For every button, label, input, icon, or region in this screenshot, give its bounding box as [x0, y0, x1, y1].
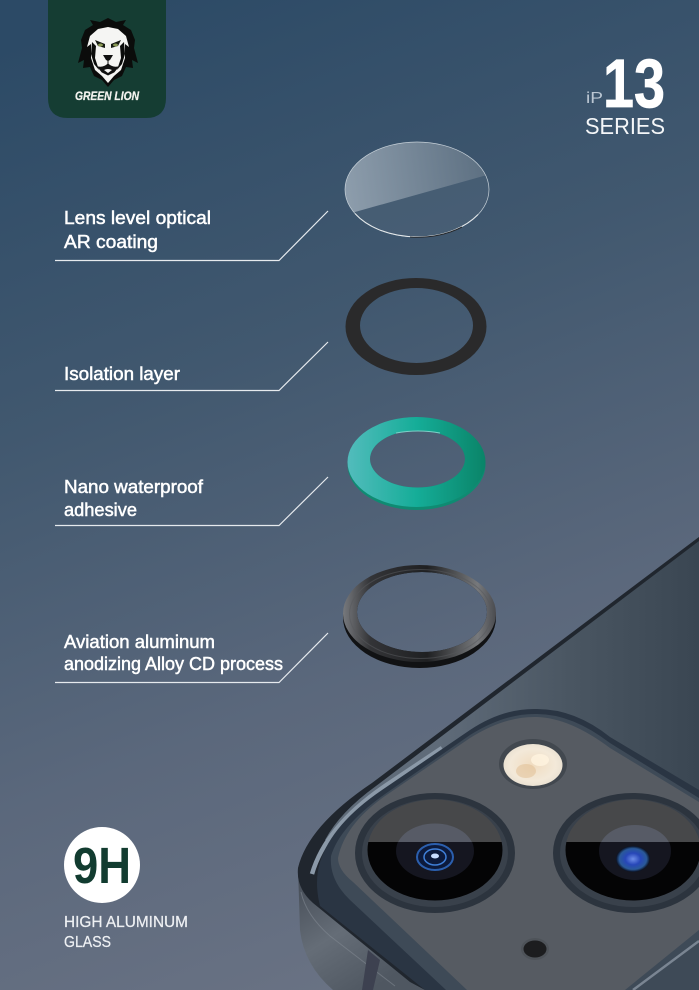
callout: Isolation layer [55, 342, 328, 390]
phone back surface [325, 541, 699, 990]
callout: Aviation aluminum anodizing Alloy CD process [55, 631, 328, 682]
camera lens left [355, 793, 515, 913]
badge: 9H high aluminum glass: 9H [73, 837, 131, 894]
callout: Lens level optical AR coating: Lens level optical [64, 207, 211, 228]
badge: 9H high aluminum glass: HIGH ALUMINUM [64, 914, 188, 931]
logo wordmark: GREEN LION [75, 89, 139, 103]
callout: Nano waterproof adhesive: Nano waterproof [64, 476, 204, 497]
phone: iPhone camera corner [298, 537, 699, 990]
callout: Nano waterproof adhesive [55, 476, 328, 526]
callout: Nano waterproof adhesive: adhesive [64, 499, 137, 520]
badge: 9H high aluminum glass [64, 827, 188, 951]
camera lens right [553, 793, 699, 913]
plateau mid band [331, 714, 699, 990]
callout: Aviation aluminum anodizing Alloy CD process: Aviation aluminum [64, 631, 215, 652]
layer: glass disc [345, 142, 489, 237]
layer: aluminum alloy ring [343, 565, 496, 668]
callout: Lens level optical AR coating: AR coating [64, 231, 158, 252]
layer: black isolation ring [346, 278, 486, 375]
camera plateau surface [338, 717, 699, 990]
series badge: iP 13 SERIES [585, 45, 665, 139]
icon: lion head [78, 18, 138, 87]
logo panel: Green Lion [48, 0, 166, 118]
phone edge dark band [298, 537, 699, 990]
series badge: iP 13 SERIES: iP [586, 90, 603, 107]
phone side band [298, 537, 699, 990]
series badge: iP 13 SERIES: 13 [603, 45, 665, 122]
series badge: iP 13 SERIES: SERIES [585, 113, 665, 139]
rim highlight [312, 748, 442, 874]
badge: 9H high aluminum glass: GLASS [64, 934, 111, 951]
phone side strap [362, 950, 380, 990]
callout: Aviation aluminum anodizing Alloy CD process: anodizing Alloy CD process [64, 653, 283, 674]
lower right edge [633, 941, 699, 990]
layer: teal adhesive ring [348, 417, 486, 510]
plateau rim [317, 709, 699, 990]
callout: Isolation layer: Isolation layer [64, 363, 180, 384]
flash [499, 739, 567, 789]
callout: Lens level optical AR coating [55, 207, 328, 260]
microphone [521, 938, 549, 960]
